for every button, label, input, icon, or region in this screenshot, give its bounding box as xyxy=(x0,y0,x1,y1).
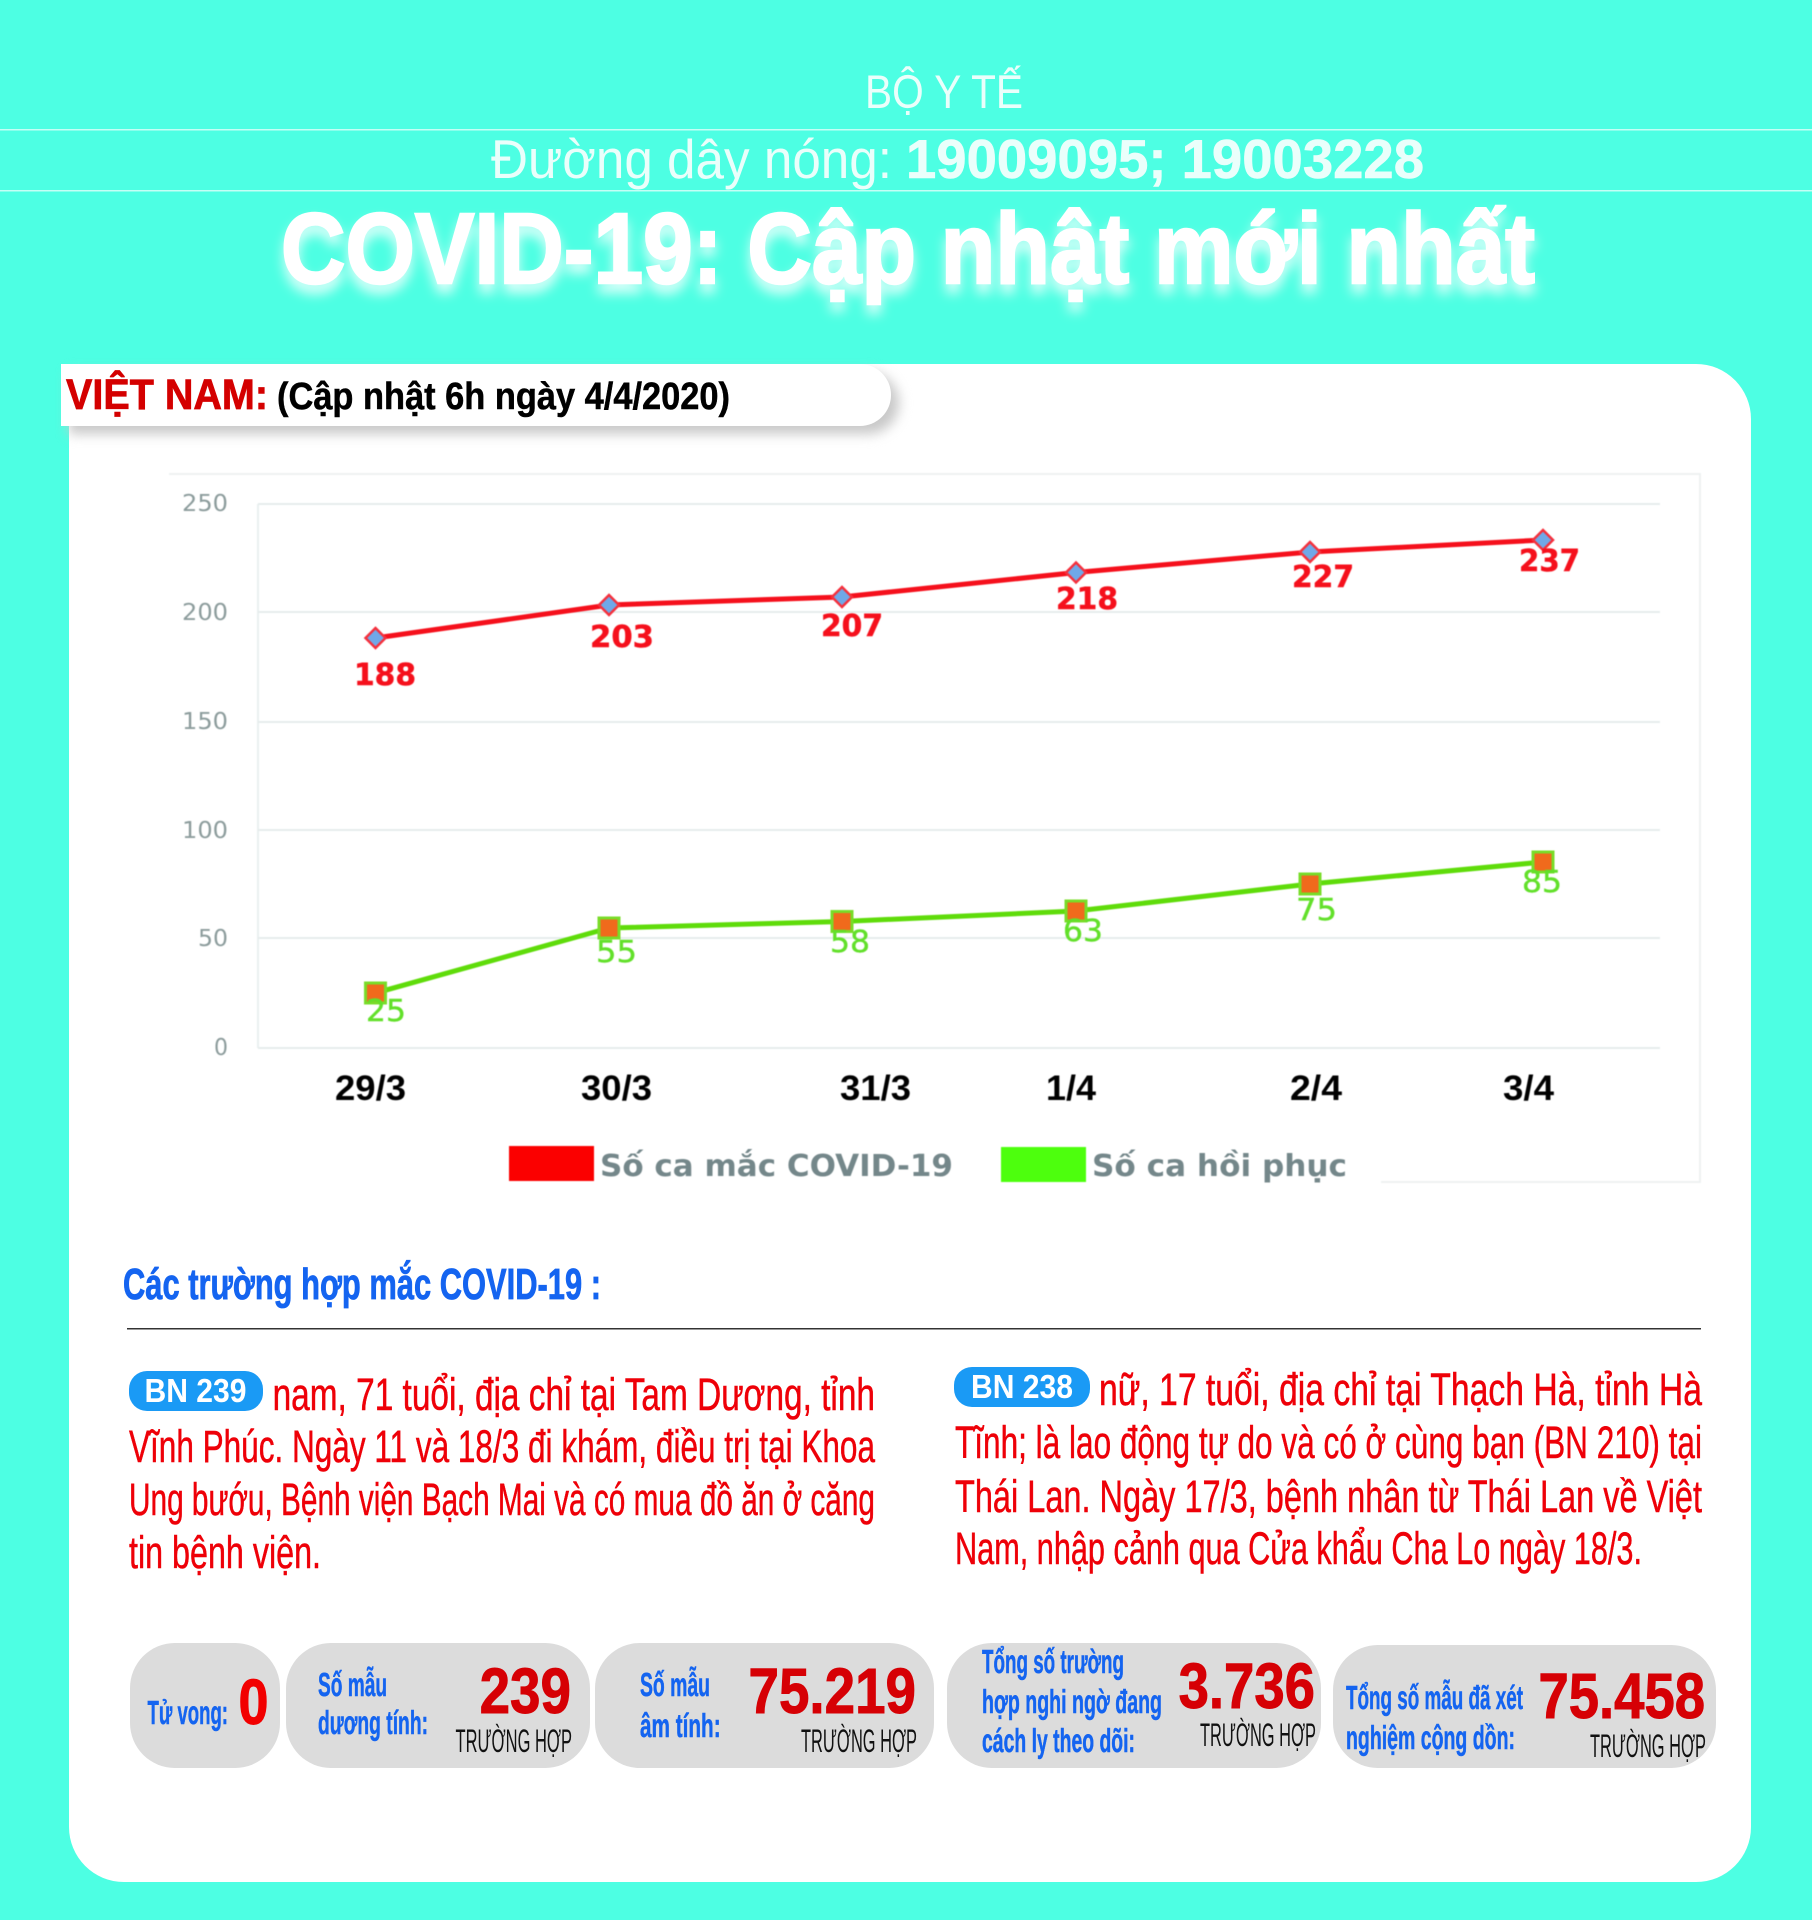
stat: negative samples: TRƯỜNG HỢP xyxy=(801,1723,917,1759)
stat: total samples tested: 75.458 xyxy=(1538,1660,1705,1732)
case text: BN 238 xyxy=(954,1364,1703,1574)
stat: suspected cases under quarantine: hợp nghi ngờ đang xyxy=(982,1683,1162,1720)
badge: BN 239: BN 239 xyxy=(144,1372,246,1409)
stat: negative samples: Số mẫu xyxy=(640,1666,710,1703)
stat: negative samples: âm tính: xyxy=(640,1707,721,1744)
stat: positive samples: dương tính: xyxy=(318,1704,428,1741)
x axis date labels xyxy=(335,1069,1555,1108)
case text: BN 239 xyxy=(129,1369,876,1578)
stat: suspected cases under quarantine: TRƯỜNG HỢP xyxy=(1200,1717,1316,1753)
stat: suspected cases under quarantine: cách ly theo dõi: xyxy=(982,1722,1135,1759)
header: ministry of health: BỘ Y TẾ xyxy=(865,65,1023,118)
x axis date labels: 31/3 xyxy=(840,1069,911,1108)
series: confirmed cases line: 218 xyxy=(1056,582,1118,617)
y axis labels: 150 xyxy=(182,709,228,735)
stat: total samples tested xyxy=(1333,1645,1716,1768)
stat: deaths: 0 xyxy=(238,1666,268,1738)
legend: Số ca hồi phục xyxy=(1092,1149,1347,1184)
header: hotline: Đường dây nóng: xyxy=(491,128,892,190)
stat: deaths: Tử vong: xyxy=(148,1694,228,1731)
panel: main white card xyxy=(69,364,1751,1882)
series: confirmed cases line xyxy=(354,530,1580,693)
case text: BN 239: Ung bướu, Bệnh viện Bạch Mai và có mua đồ ăn ở căng xyxy=(129,1474,875,1525)
case text: BN 239: Vĩnh Phúc. Ngày 11 và 18/3 đi khám, điều trị tại Khoa xyxy=(129,1421,876,1472)
tag: update time: (Cập nhật 6h ngày 4/4/2020) xyxy=(277,376,730,418)
stat: positive samples: Số mẫu xyxy=(318,1666,387,1703)
y axis labels: 250 xyxy=(182,491,228,517)
series: recovered cases line: 63 xyxy=(1063,914,1103,949)
stat: suspected cases under quarantine: Tổng số trường xyxy=(982,1643,1124,1680)
stat: total samples tested: nghiệm cộng dồn: xyxy=(1346,1719,1515,1756)
series: recovered cases line xyxy=(366,852,1562,1029)
stat: negative samples xyxy=(595,1643,934,1768)
series: confirmed cases line: 237 xyxy=(1519,544,1580,579)
series: recovered cases line: 58 xyxy=(830,925,870,960)
header: hotline: 19009095; 19003228 xyxy=(906,128,1424,190)
x axis date labels: 2/4 xyxy=(1290,1069,1343,1108)
header: hotline xyxy=(491,128,1424,190)
stat: suspected cases under quarantine: 3.736 xyxy=(1179,1650,1315,1722)
line chart xyxy=(169,474,1700,1184)
series: confirmed cases line: 227 xyxy=(1292,560,1354,595)
stat: positive samples: 239 xyxy=(480,1655,571,1727)
y axis labels: 100 xyxy=(182,818,228,844)
x axis date labels: 29/3 xyxy=(335,1069,406,1108)
series: confirmed cases line: 207 xyxy=(821,609,883,644)
x axis date labels: 30/3 xyxy=(581,1069,652,1108)
case text: BN 239: tin bệnh viện. xyxy=(129,1527,321,1578)
x axis date labels: 3/4 xyxy=(1503,1069,1555,1108)
series: recovered cases line: 85 xyxy=(1522,865,1562,900)
series: recovered cases line: 55 xyxy=(596,935,637,970)
tag: Vietnam label: VIỆT NAM: xyxy=(66,370,268,419)
y axis labels xyxy=(182,491,228,1061)
series: confirmed cases line: 203 xyxy=(590,620,654,655)
stat: total samples tested: Tổng số mẫu đã xét xyxy=(1346,1679,1523,1716)
stat: positive samples: TRƯỜNG HỢP xyxy=(456,1723,572,1759)
legend xyxy=(509,1146,1347,1184)
section heading: Các trường hợp mắc COVID-19 : xyxy=(123,1259,601,1309)
y axis labels: 200 xyxy=(182,600,228,626)
x axis date labels: 1/4 xyxy=(1046,1069,1097,1108)
y axis labels: 0 xyxy=(214,1035,228,1061)
case text: BN 239: nam, 71 tuổi, địa chỉ tại Tam Dương, tỉnh xyxy=(273,1369,875,1420)
stat: positive samples xyxy=(286,1643,590,1768)
series: recovered cases line: 75 xyxy=(1296,893,1337,928)
title: COVID-19: Cập nhật mới nhất xyxy=(281,193,1535,305)
stat: deaths xyxy=(130,1643,280,1768)
series: recovered cases line: 25 xyxy=(366,994,406,1029)
legend: Số ca mắc COVID-19 xyxy=(600,1148,953,1184)
stat: negative samples: 75.219 xyxy=(748,1655,916,1727)
series: confirmed cases line: 188 xyxy=(354,658,416,693)
stat: suspected cases under quarantine xyxy=(947,1643,1321,1768)
stat: total samples tested: TRƯỜNG HỢP xyxy=(1590,1728,1706,1764)
y axis labels: 50 xyxy=(198,926,228,952)
date tag xyxy=(61,364,899,434)
badge: BN 238: BN 238 xyxy=(971,1368,1073,1405)
